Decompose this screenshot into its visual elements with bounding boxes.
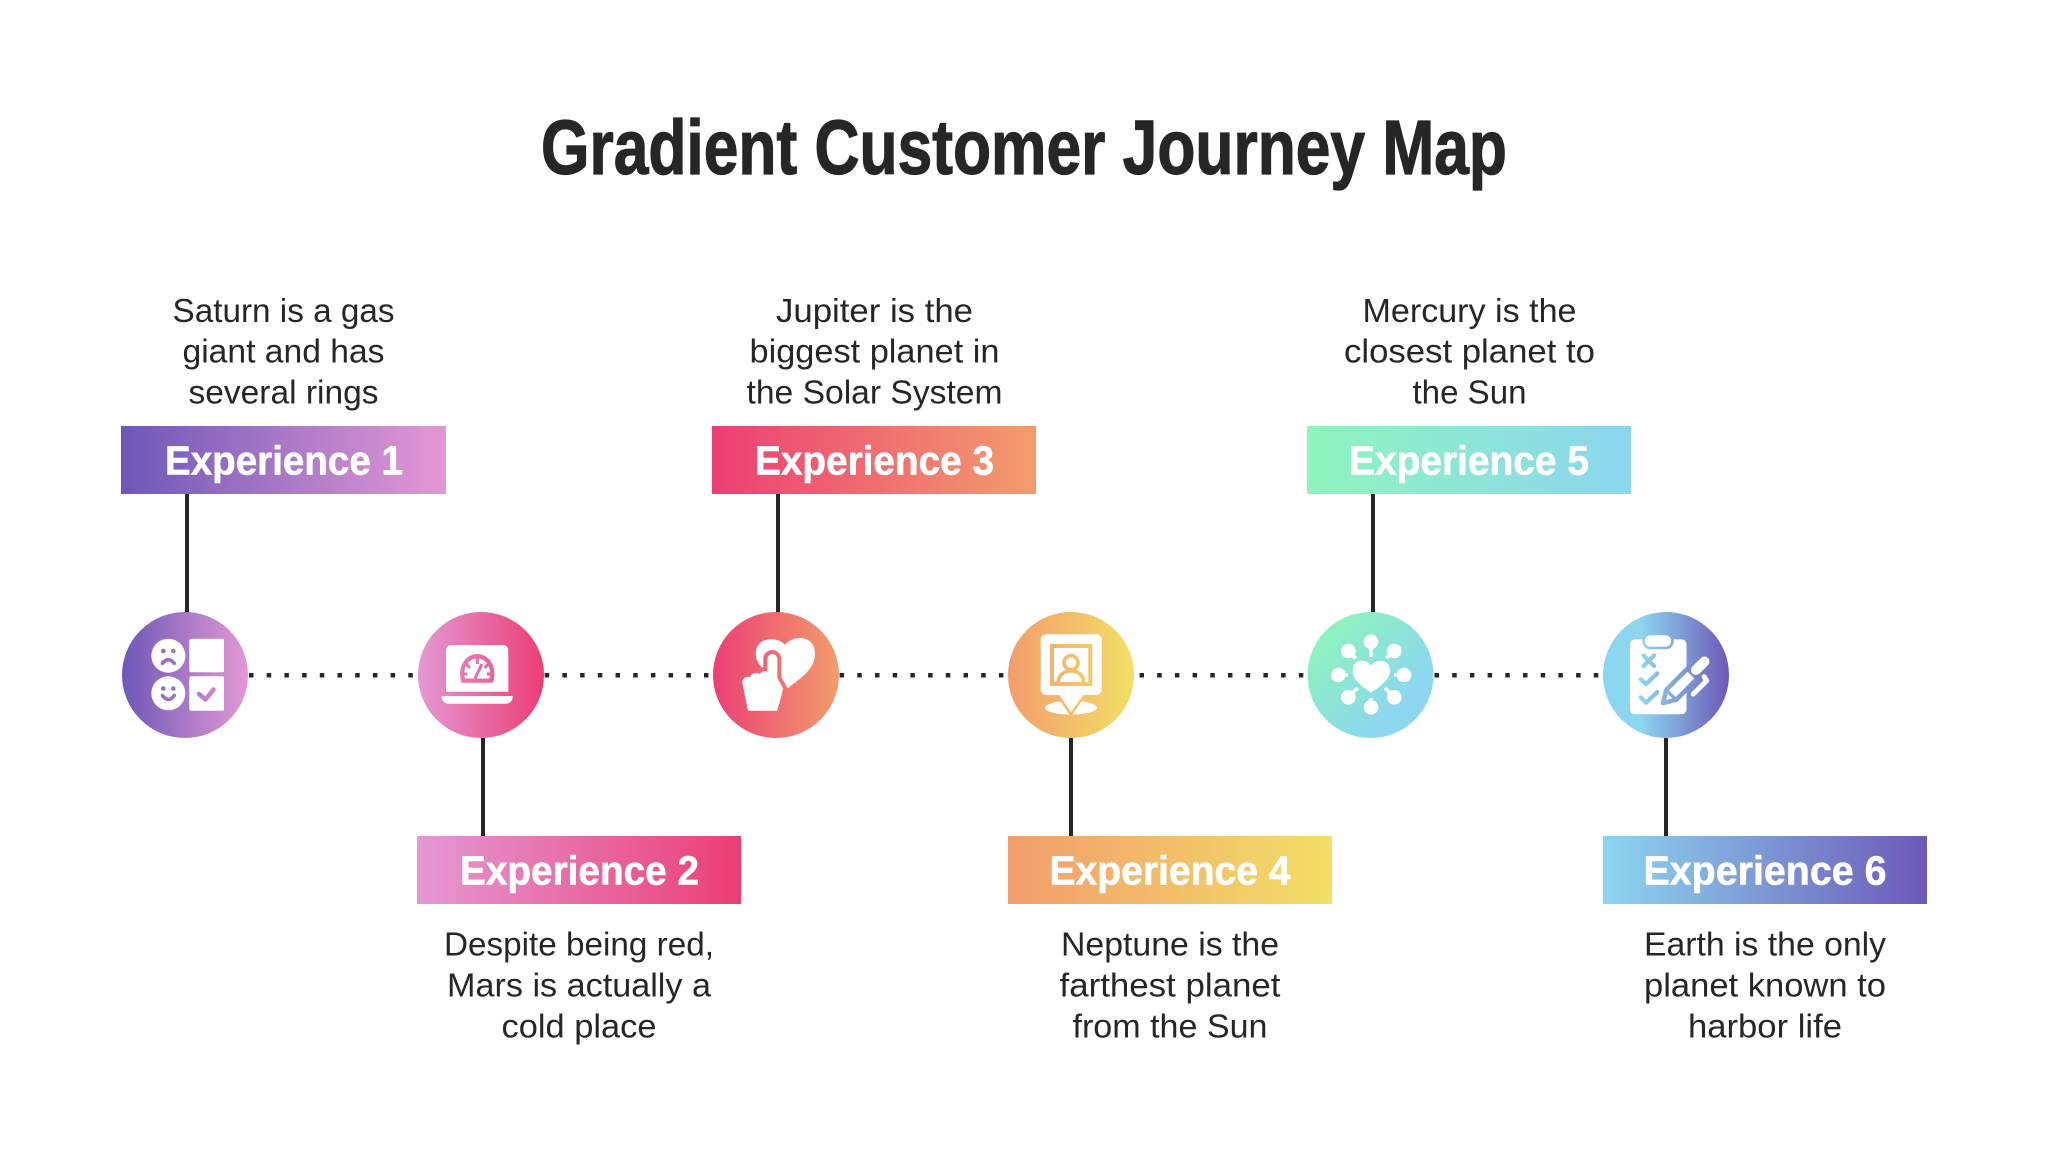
description 4 xyxy=(1060,926,1280,1044)
description 1: several rings xyxy=(188,374,378,410)
connector 3 xyxy=(776,494,780,613)
connector 2 xyxy=(481,738,485,836)
label box 3: Experience 3 xyxy=(755,438,994,484)
connector 4 xyxy=(1069,738,1073,836)
label box 5: Experience 5 xyxy=(1349,438,1589,484)
description 3: biggest planet in xyxy=(750,332,1000,370)
step: experience 1 xyxy=(121,292,446,738)
icon: clipboard checklist with pen xyxy=(1603,612,1729,738)
step: experience 2 xyxy=(417,612,741,1044)
title: Gradient Customer Journey Map xyxy=(541,105,1507,191)
description 6: harbor life xyxy=(1688,1008,1842,1044)
label box 6 xyxy=(1603,836,1927,904)
connector 5 xyxy=(1371,494,1375,613)
icon: heart with radiating connections xyxy=(1308,612,1434,738)
description 3: the Solar System xyxy=(746,374,1002,410)
step: experience 4 xyxy=(1008,612,1332,1044)
description 6 xyxy=(1644,926,1887,1044)
description 6: planet known to xyxy=(1644,966,1886,1004)
description 1 xyxy=(172,292,394,410)
label box 1: Experience 1 xyxy=(165,438,403,484)
description 5: the Sun xyxy=(1412,374,1526,410)
label box 4: Experience 4 xyxy=(1050,848,1291,894)
label box 4 xyxy=(1008,836,1332,904)
label box 3 xyxy=(712,426,1036,494)
dotted timeline xyxy=(249,673,1598,678)
description 4: farthest planet xyxy=(1060,966,1280,1004)
label box 1 xyxy=(121,426,446,494)
description 6: Earth is the only xyxy=(1644,926,1887,962)
description 3: Jupiter is the xyxy=(776,292,973,329)
icon: laptop with gauge xyxy=(418,612,544,738)
step: experience 3 xyxy=(712,292,1036,738)
step: experience 5 xyxy=(1307,292,1631,738)
connector 6 xyxy=(1664,738,1668,836)
description 2: cold place xyxy=(502,1008,656,1044)
icon: hand touching heart xyxy=(713,612,839,738)
description 1: giant and has xyxy=(182,332,384,370)
label box 2: Experience 2 xyxy=(460,848,699,894)
description 5 xyxy=(1344,292,1595,410)
label box 2 xyxy=(417,836,741,904)
description 4: Neptune is the xyxy=(1061,926,1279,962)
description 3 xyxy=(746,292,1002,410)
icon: feedback faces and checkboxes xyxy=(122,612,248,738)
description 2: Despite being red, xyxy=(444,926,714,962)
connector 1 xyxy=(185,494,189,613)
description 2 xyxy=(444,926,714,1044)
description 4: from the Sun xyxy=(1072,1008,1268,1044)
label box 6: Experience 6 xyxy=(1644,848,1886,894)
description 2: Mars is actually a xyxy=(447,966,712,1004)
step: experience 6 xyxy=(1603,612,1927,1044)
description 5: closest planet to xyxy=(1344,332,1595,370)
description 1: Saturn is a gas xyxy=(172,292,394,329)
icon: profile map pin xyxy=(1008,612,1134,738)
label box 5 xyxy=(1307,426,1631,494)
description 5: Mercury is the xyxy=(1362,292,1576,329)
